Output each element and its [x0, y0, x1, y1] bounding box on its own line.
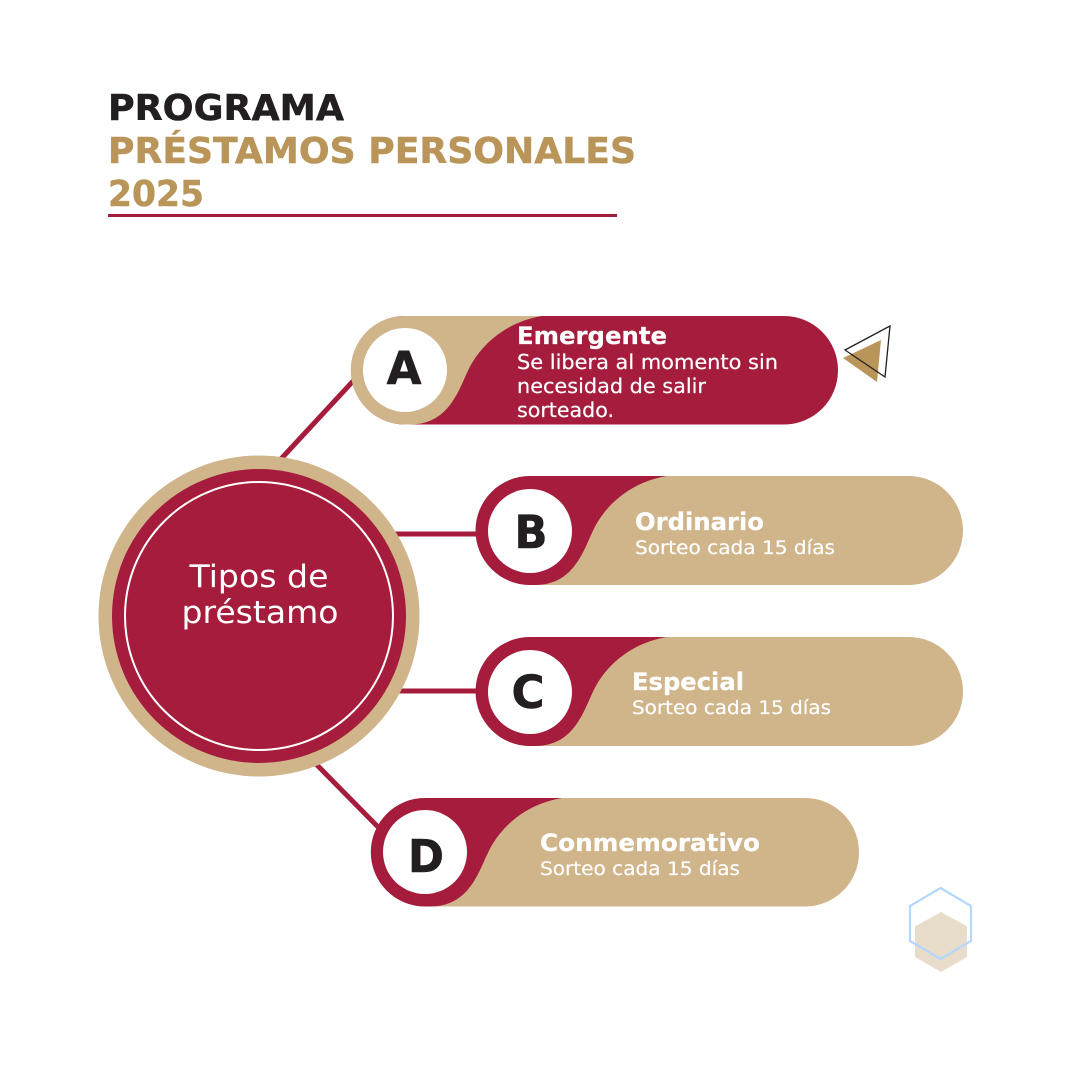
- panel: A Emergente: [351, 316, 838, 424]
- panel: D Conmemorativo: [371, 798, 859, 906]
- panel: B Ordinario: Sorteo cada 15 días: [635, 537, 835, 559]
- title: PROGRAMA: [108, 88, 344, 129]
- panel: A Emergente: Se libera al momento sin: [517, 350, 778, 374]
- connector lines: [280, 379, 478, 831]
- panel: C Especial: C: [511, 666, 545, 719]
- panel: A Emergente: A: [387, 342, 422, 395]
- panel: C Especial: Sorteo cada 15 días: [632, 697, 831, 719]
- panel: B Ordinario: [476, 476, 963, 585]
- panel: A Emergente: necesidad de salir: [517, 374, 707, 398]
- panel: B Ordinario: Ordinario: [635, 508, 764, 536]
- panel: D Conmemorativo: D: [408, 830, 444, 883]
- panel: A Emergente: sorteado.: [517, 398, 614, 422]
- panel: C Especial: Especial: [632, 668, 744, 696]
- title: PRÉSTAMOS PERSONALES: [108, 130, 636, 172]
- icon: hexagons: [910, 888, 971, 972]
- panel: D Conmemorativo: Sorteo cada 15 días: [540, 858, 740, 880]
- central circle: tipos de préstamo: [98, 456, 420, 776]
- icon: triangles: [843, 326, 890, 382]
- central circle: tipos de préstamo: Tipos de: [188, 559, 328, 595]
- panel: B Ordinario: B: [514, 506, 548, 559]
- title: [108, 88, 636, 217]
- panel: A Emergente: Emergente: [517, 322, 667, 350]
- panel: D Conmemorativo: Conmemorativo: [540, 829, 760, 857]
- panel: C Especial: [476, 637, 963, 746]
- central circle: tipos de préstamo: préstamo: [182, 595, 338, 631]
- title: 2025: [108, 174, 204, 215]
